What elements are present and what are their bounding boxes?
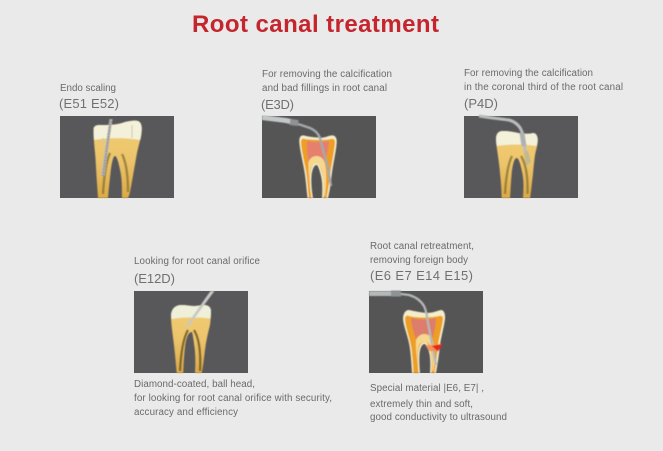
image: tooth with retreatment tip and red foreign body	[369, 291, 483, 373]
title: Root canal treatment	[192, 11, 439, 38]
text: E12D description: Looking for root canal orifice	[134, 256, 261, 267]
text: E3D description: For removing the calcification	[262, 69, 392, 80]
text: E6 E7 notes: good conductivity to ultrasound	[370, 412, 507, 423]
image: tooth with E12D tip	[134, 291, 248, 373]
text: E12D code: (E12D)	[134, 271, 175, 286]
panel: E6 E7 E14 E15	[369, 241, 507, 423]
panel: P4D	[464, 68, 623, 198]
text: P4D code: (P4D)	[464, 96, 498, 111]
text: E6 E7 notes	[370, 383, 507, 423]
text: E6 E7 notes: extremely thin and soft,	[370, 399, 473, 410]
text: E12D notes: for looking for root canal orifice with security,	[134, 393, 332, 404]
text: E6 E7 notes: Special material |E6, E7| ,	[370, 383, 484, 394]
text: E6 E7 E14 E15 description: Root canal retreatment,	[370, 241, 474, 252]
panel: E51 E52	[59, 83, 174, 198]
text: E6 E7 E14 E15 code: (E6 E7 E14 E15)	[370, 268, 473, 283]
text: E12D notes: Diamond-coated, ball head,	[134, 379, 255, 390]
panel: P4D: in the coronal third of the root canal	[464, 82, 623, 93]
panel: E3D	[261, 69, 392, 198]
text: P4D description: For removing the calcification	[464, 68, 593, 79]
panel: E12D	[134, 256, 332, 418]
panel: E6 E7 E14 E15: removing foreign body	[370, 255, 468, 266]
image: tooth with endo scaling file	[60, 116, 174, 198]
text: E51 E52 code: (E51 E52)	[59, 96, 119, 111]
image: tooth with E3D tip	[262, 116, 376, 198]
text: E51 E52 description: Endo scaling	[60, 83, 116, 94]
text: E3D code: (E3D)	[261, 97, 294, 112]
text: E12D notes: accuracy and efficiency	[134, 407, 238, 418]
image: tooth with P4D tip	[464, 116, 578, 198]
panel: E3D: and bad fillings in root canal	[262, 83, 387, 94]
text: E12D notes	[134, 379, 332, 418]
